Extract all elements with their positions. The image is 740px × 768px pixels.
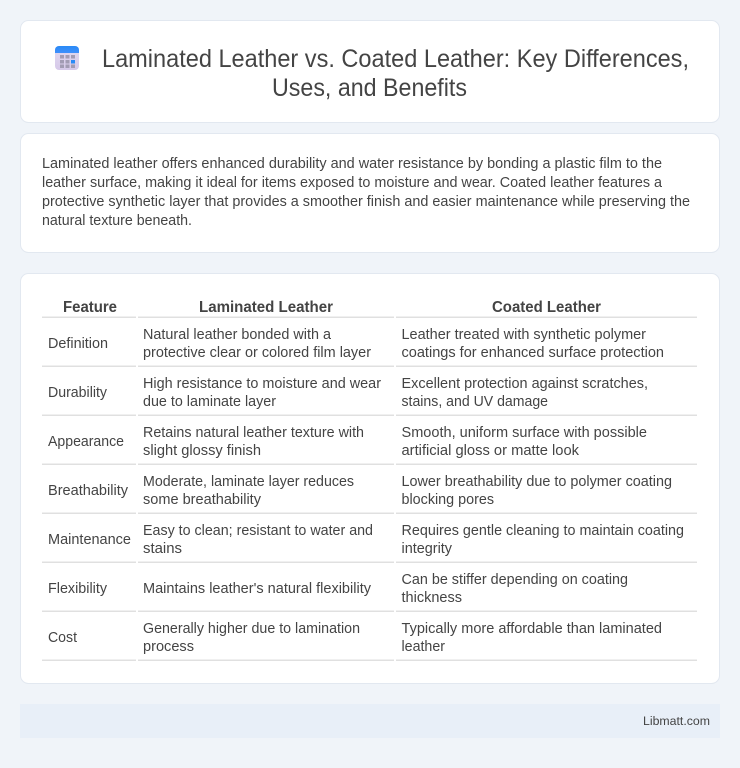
title: Uses, and Benefits <box>272 74 467 102</box>
row: cost: Generally higher due to lamination <box>143 621 360 637</box>
row: appearance: artificial gloss or matte look <box>402 443 580 459</box>
icon: calendar <box>55 46 79 70</box>
row: flexibility: Maintains leather's natural flexibility <box>143 581 372 597</box>
row: breathability: blocking pores <box>402 492 494 508</box>
panel: header card <box>20 20 720 122</box>
row: cost: process <box>143 639 194 655</box>
row: definition: Leather treated with synthetic polymer <box>402 327 646 343</box>
intro text: protective synthetic layer that provides a smoother finish and easier maintenance while preserving the <box>42 194 690 210</box>
row: appearance: Appearance <box>48 434 124 450</box>
row: durability <box>48 376 648 410</box>
intro text: leather surface, making it ideal for items exposed to moisture and wear. Coated leather features a <box>42 175 663 191</box>
row: breathability: some breathability <box>143 492 262 508</box>
intro text: Laminated leather offers enhanced durability and water resistance by bonding a plastic film to the <box>42 156 662 172</box>
row: durability: due to laminate layer <box>143 394 276 410</box>
intro text <box>42 156 690 229</box>
row: cost: Cost <box>48 630 77 646</box>
row: appearance: slight glossy finish <box>143 443 261 459</box>
row: durability: High resistance to moisture and wear <box>143 376 381 392</box>
row: breathability <box>48 474 672 508</box>
row: definition: coatings for enhanced surface protection <box>402 345 664 361</box>
panel: intro card <box>20 134 720 252</box>
row: maintenance <box>48 523 684 557</box>
row: maintenance: stains <box>143 541 182 557</box>
title <box>102 45 689 102</box>
row: definition: Natural leather bonded with a <box>143 327 332 343</box>
panel: comparison table <box>20 274 720 684</box>
row: appearance <box>48 425 647 459</box>
row: cost <box>48 621 662 655</box>
table header row: Feature <box>63 299 117 316</box>
footer <box>20 704 720 738</box>
row: definition: protective clear or colored film layer <box>143 345 371 361</box>
table header row: Coated Leather <box>492 299 601 316</box>
footer credit: Libmatt.com <box>643 714 710 728</box>
row: flexibility: Flexibility <box>48 581 108 597</box>
table header row: Laminated Leather <box>199 299 333 316</box>
row: flexibility: Can be stiffer depending on coating <box>402 572 628 588</box>
row: durability: Excellent protection against scratches, <box>402 376 648 392</box>
row: cost: Typically more affordable than laminated <box>402 621 662 637</box>
row: definition <box>48 327 664 361</box>
row: maintenance: Easy to clean; resistant to water and <box>143 523 373 539</box>
intro text: natural texture beneath. <box>42 213 192 229</box>
row: appearance: Retains natural leather texture with <box>143 425 364 441</box>
row: maintenance: Maintenance <box>48 532 131 548</box>
row: maintenance: Requires gentle cleaning to maintain coating <box>402 523 684 539</box>
row: breathability: Breathability <box>48 483 129 499</box>
row: durability: Durability <box>48 385 108 401</box>
row: breathability: Lower breathability due to polymer coating <box>402 474 672 490</box>
row: durability: stains, and UV damage <box>402 394 548 410</box>
title: Laminated Leather vs. Coated Leather: Key Differences, <box>102 45 689 73</box>
row: cost: leather <box>402 639 445 655</box>
table header row <box>63 299 601 316</box>
row: maintenance: integrity <box>402 541 453 557</box>
row: flexibility: thickness <box>402 590 462 606</box>
row: flexibility <box>48 572 628 606</box>
row: appearance: Smooth, uniform surface with possible <box>402 425 647 441</box>
row: breathability: Moderate, laminate layer reduces <box>143 474 354 490</box>
row: definition: Definition <box>48 336 108 352</box>
